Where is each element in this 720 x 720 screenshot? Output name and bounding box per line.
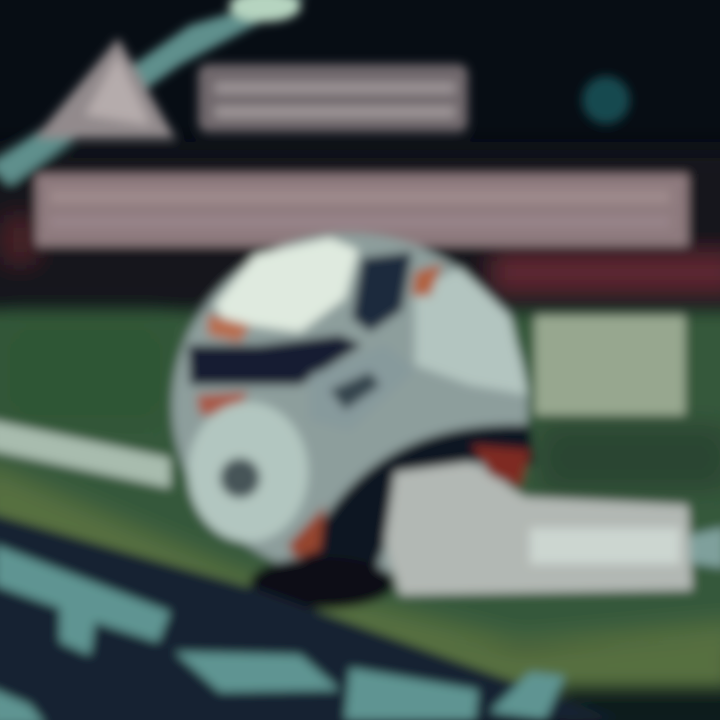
dark top stripe [352, 252, 412, 332]
red accent [197, 392, 248, 415]
bottom blurred caption [0, 545, 565, 720]
pitch line [0, 420, 170, 488]
boot shadow [250, 557, 394, 609]
football [172, 233, 535, 590]
dark left band [188, 335, 362, 385]
lower left panel [188, 402, 308, 542]
dark curve [280, 425, 535, 590]
stadium band and pitch [0, 150, 720, 720]
white boot [385, 462, 720, 595]
teal streak [0, 0, 310, 185]
heading block [198, 64, 468, 132]
centre silver panel [310, 345, 415, 430]
right panel [415, 268, 528, 395]
field marking box [535, 315, 685, 415]
logo triangle [35, 38, 175, 138]
orange accent [412, 264, 442, 296]
white top panel [215, 238, 358, 332]
bottom dark band [0, 510, 620, 720]
banner [36, 174, 688, 246]
teal dot [582, 76, 630, 124]
